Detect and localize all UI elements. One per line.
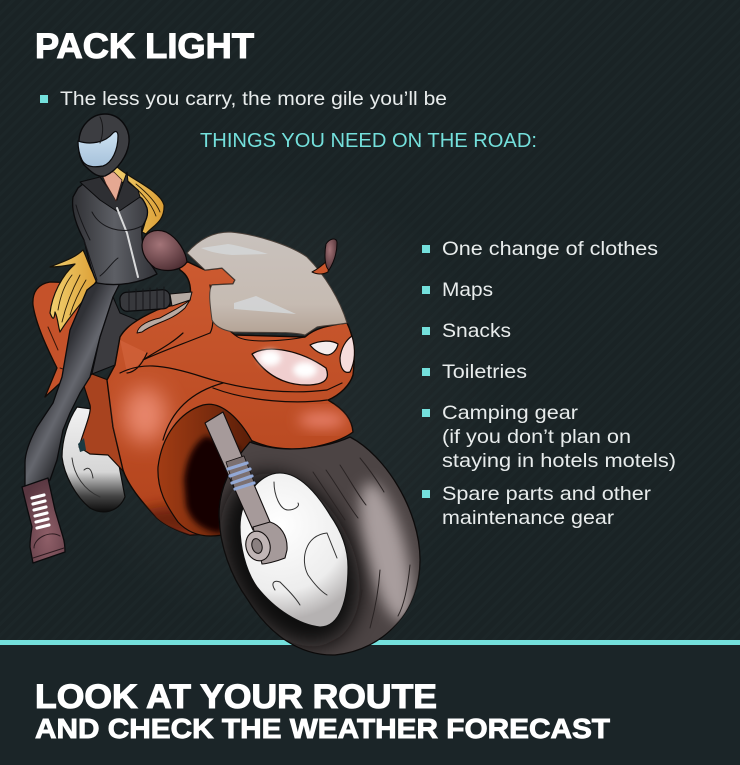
front fork: [205, 412, 287, 564]
motorcycle body: [78, 262, 354, 536]
body lines: [120, 285, 342, 440]
item: camping gear: staying in hotels motels): [442, 450, 676, 472]
item: camping gear: [422, 402, 676, 472]
intro bullet: The less you carry, the more gile you’ll be: [60, 88, 447, 110]
item: spare parts: Spare parts and other: [442, 483, 652, 505]
wheel arch: [158, 404, 252, 536]
headlights: [252, 336, 354, 385]
bottom band: [0, 640, 740, 765]
checklist: [422, 238, 676, 529]
footer heading: AND CHECK THE WEATHER FORECAST: [35, 713, 610, 744]
item: camping gear: Camping gear: [442, 402, 579, 424]
boot: [22, 478, 65, 563]
illustration: rider on motorcycle: [22, 114, 423, 670]
mirror left: [142, 231, 187, 270]
item: spare parts: [422, 483, 652, 529]
footer heading: [35, 678, 610, 744]
item: clothes: One change of clothes: [442, 238, 658, 260]
helmet: [78, 114, 129, 176]
item: spare parts: maintenance gear: [442, 507, 615, 529]
hair: [50, 166, 164, 332]
item: toiletries: Toiletries: [442, 361, 527, 383]
rider torso: [73, 172, 157, 285]
title: pack light: PACK LIGHT: [35, 27, 254, 66]
lower left fairing: [79, 374, 124, 472]
hip: [92, 297, 137, 374]
front wheel: [218, 436, 421, 656]
handlebar grip: [119, 287, 192, 312]
item: snacks: Snacks: [442, 320, 511, 342]
mirror right: [312, 239, 337, 274]
rear seat: [33, 282, 100, 397]
subheading: THINGS YOU NEED ON THE ROAD:: [200, 129, 537, 152]
item: maps: Maps: [442, 279, 493, 301]
item: maps: [422, 279, 493, 301]
footer heading: LOOK AT YOUR ROUTE: [35, 678, 437, 716]
windshield: [187, 232, 347, 335]
item: camping gear: (if you don’t plan on: [442, 426, 631, 448]
rear wheel: [62, 407, 125, 512]
rider leg: [25, 282, 120, 486]
